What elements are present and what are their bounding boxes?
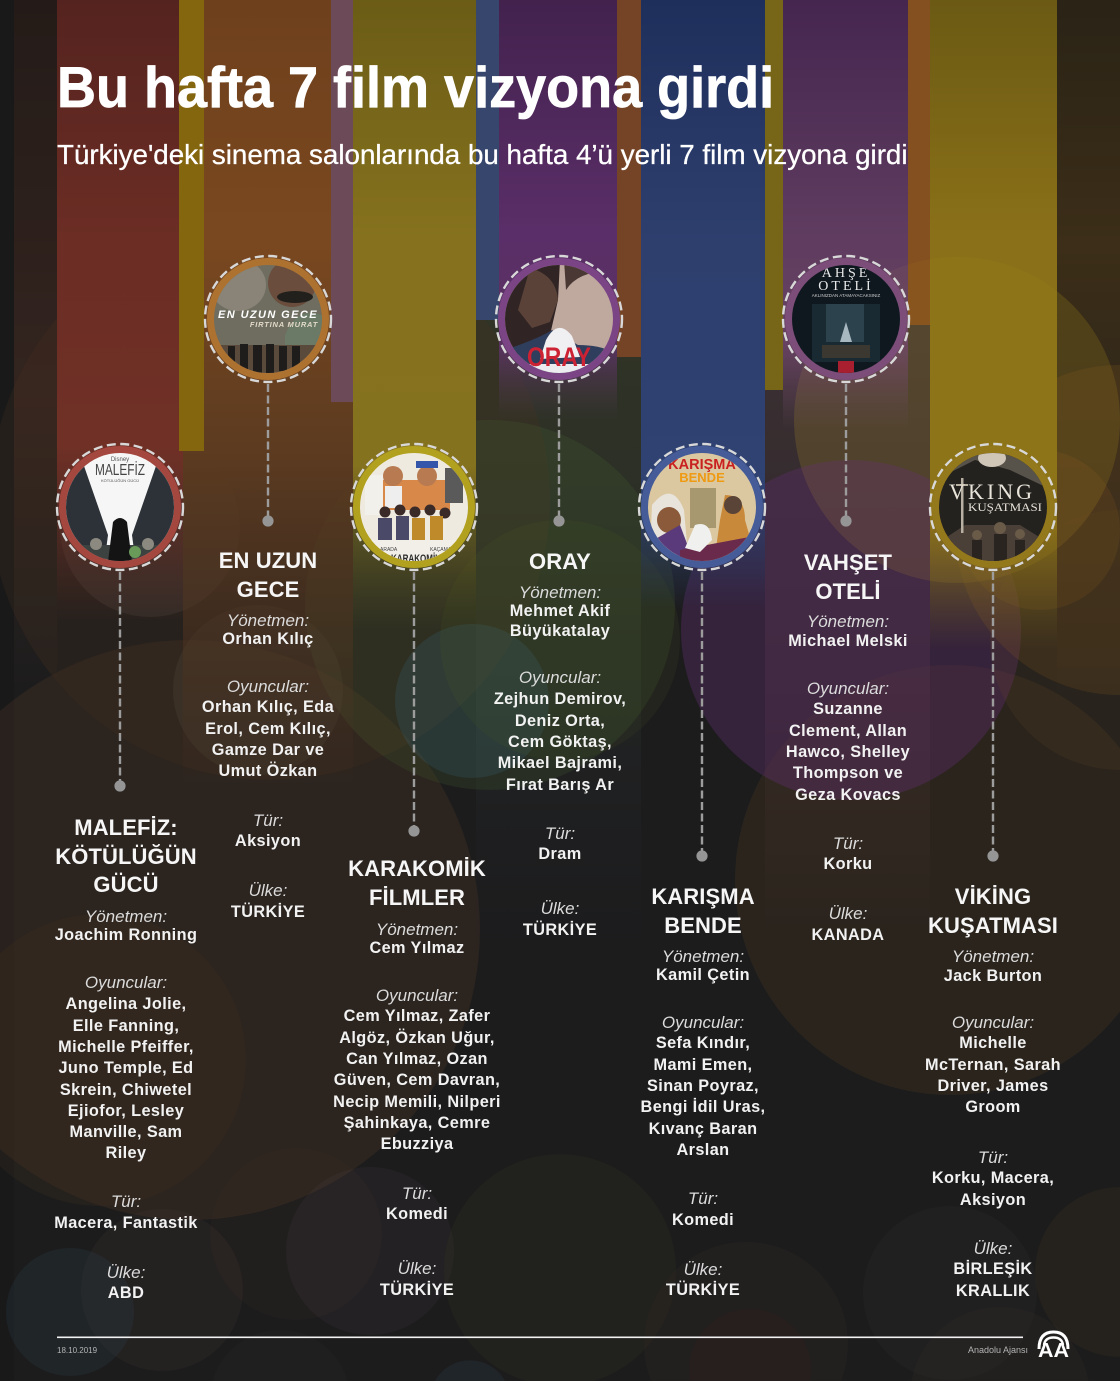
cast: Clement, Allan [789, 722, 907, 740]
cast label: Oyuncular: [952, 1013, 1034, 1032]
director label: Yönetmen: [227, 611, 309, 630]
cast: Can Yılmaz, Ozan [346, 1050, 488, 1068]
genre label: Tür: [978, 1148, 1008, 1167]
genre: Komedi [386, 1205, 448, 1223]
film title: BENDE [664, 913, 742, 938]
film title: ORAY [529, 549, 591, 574]
genre: Macera, Fantastik [54, 1214, 198, 1232]
poster: Vahşet Oteli: AKLINIZDAN ATAMAYACAKSINIZ [812, 293, 880, 298]
cast [202, 698, 334, 780]
genre: Aksiyon [235, 832, 301, 850]
cast: Ejiofor, Lesley [68, 1102, 184, 1120]
cast: Bengi İdil Uras, [641, 1098, 765, 1116]
genre: Korku, Macera, [932, 1169, 1054, 1187]
cast: Suzanne [813, 700, 883, 718]
film title: GÜCÜ [93, 872, 159, 897]
poster: Vahşet Oteli: OTELİ [818, 278, 874, 294]
director: Michael Melski [788, 632, 908, 650]
film title: KARAKOMİK [348, 856, 486, 881]
cast [925, 1034, 1061, 1116]
director [510, 602, 610, 640]
film title: KARIŞMA [651, 884, 755, 909]
poster: Viking Kuşatması: V [949, 479, 965, 504]
poster: En Uzun Gece: EN UZUN GECE [218, 309, 318, 321]
poster: Karakomik Filmler: ARADA [380, 547, 398, 553]
cast: Michelle Pfeiffer, [58, 1038, 194, 1056]
connector end dots [114, 515, 999, 862]
poster: Oray: ORAY [527, 342, 591, 372]
panel: Vahşet Oteli [786, 550, 910, 944]
film title: FİLMLER [369, 885, 465, 910]
film title: GECE [237, 577, 299, 602]
genre label: Tür: [688, 1189, 718, 1208]
cast label: Oyuncular: [807, 679, 889, 698]
director: Jack Burton [944, 967, 1042, 985]
genre [932, 1169, 1054, 1209]
cast: Şahinkaya, Cemre [344, 1114, 490, 1132]
cast [641, 1034, 765, 1159]
panel: Viking Kuşatması [925, 884, 1061, 1300]
genre label: Tür: [833, 834, 863, 853]
poster: Viking Kuşatması: KUŞATMASI [968, 500, 1042, 514]
cast: Thompson ve [793, 764, 903, 782]
cast: Algöz, Özkan Uğur, [339, 1029, 495, 1047]
poster: Viking Kuşatması [930, 444, 1056, 570]
cast: Orhan Kılıç, Eda [202, 698, 334, 716]
poster: Karakomik Filmler: KARAKOMİK [391, 552, 441, 565]
date: 18.10.2019 [57, 1346, 97, 1355]
country label: Ülke: [107, 1263, 145, 1282]
director label: Yönetmen: [376, 920, 458, 939]
cast [333, 1007, 501, 1153]
title: Bu hafta 7 film vizyona girdi [57, 56, 774, 120]
subtitle: Türkiye'deki sinema salonlarında bu hafta 4’ü yerli 7 film vizyona girdi [57, 139, 908, 170]
director: Joachim Ronning [55, 926, 197, 944]
poster: Karakomik Filmler [351, 444, 477, 570]
director label: Yönetmen: [807, 612, 889, 631]
country: KRALLIK [956, 1282, 1030, 1300]
poster: En Uzun Gece: FIRTINA MURAT [250, 320, 319, 329]
director: Büyükatalay [510, 622, 610, 640]
cast [786, 700, 910, 804]
panel: Oray [494, 549, 626, 939]
poster: Viking Kuşatması: KING [968, 479, 1032, 504]
film title: KUŞATMASI [928, 913, 1058, 938]
country: ABD [108, 1284, 144, 1302]
director label: Yönetmen: [519, 583, 601, 602]
film title [55, 815, 197, 897]
cast: Umut Özkan [218, 762, 318, 780]
genre label: Tür: [545, 824, 575, 843]
country label: Ülke: [829, 904, 867, 923]
film title [219, 548, 317, 602]
poster: Karışma Bende: BENDE [679, 470, 725, 485]
colour bars [57, 0, 1120, 800]
film title [651, 884, 755, 938]
genre label: Tür: [253, 811, 283, 830]
country: BİRLEŞİK [953, 1260, 1033, 1278]
director label: Yönetmen: [662, 947, 744, 966]
cast: Necip Memili, Nilperi [333, 1093, 501, 1111]
panel: Karakomik Filmler [333, 856, 501, 1299]
country label: Ülke: [684, 1260, 722, 1279]
genre: Dram [538, 845, 582, 863]
cast label: Oyuncular: [519, 668, 601, 687]
cast: McTernan, Sarah [925, 1056, 1061, 1074]
cast: Driver, James [937, 1077, 1049, 1095]
director label: Yönetmen: [85, 907, 167, 926]
cast: Sefa Kındır, [656, 1034, 750, 1052]
cast: Erol, Cem Kılıç, [205, 720, 331, 738]
cast: Güven, Cem Davran, [334, 1071, 500, 1089]
cast: Cem Göktaş, [508, 733, 612, 751]
film title: MALEFİZ: [74, 815, 178, 840]
film title [804, 550, 892, 604]
country: TÜRKİYE [231, 903, 305, 921]
cast [58, 995, 194, 1162]
country label: Ülke: [249, 881, 287, 900]
genre: Komedi [672, 1211, 734, 1229]
cast: Mami Emen, [653, 1056, 752, 1074]
genre label: Tür: [111, 1192, 141, 1211]
cast: Cem Yılmaz, Zafer [344, 1007, 490, 1025]
cast label: Oyuncular: [662, 1013, 744, 1032]
poster: Malefiz [57, 444, 183, 570]
cast: Gamze Dar ve [212, 741, 324, 759]
director: Mehmet Akif [510, 602, 610, 620]
poster: Malefiz: MALEFİZ [95, 460, 145, 479]
panel: Karışma Bende [641, 884, 765, 1299]
poster: En Uzun Gece [205, 256, 331, 382]
poster: Karakomik Filmler: KAÇAMAK [430, 547, 455, 553]
genre: Aksiyon [960, 1191, 1026, 1209]
cast: Michelle [959, 1034, 1027, 1052]
icon: Anadolu Ajansı logo [1038, 1332, 1069, 1362]
cast: Geza Kovacs [795, 786, 901, 804]
cast label: Oyuncular: [376, 986, 458, 1005]
cast: Zejhun Demirov, [494, 690, 626, 708]
poster: Vahşet Oteli: AHŞE [822, 266, 870, 281]
panel: Malefiz [54, 815, 198, 1302]
cast label: Oyuncular: [227, 677, 309, 696]
poster: Malefiz: Disney [111, 457, 129, 463]
film title: OTELİ [815, 579, 881, 604]
icon: Anadolu Ajansı logo: AA [1038, 1340, 1069, 1362]
cast: Riley [106, 1144, 146, 1162]
cast: Manville, Sam [70, 1123, 182, 1141]
cast: Elle Fanning, [73, 1017, 179, 1035]
poster: Karışma Bende: KARIŞMA [668, 457, 736, 473]
cast: Arslan [676, 1141, 730, 1159]
cast: Groom [965, 1098, 1021, 1116]
country label: Ülke: [541, 899, 579, 918]
panel: En Uzun Gece [202, 548, 334, 921]
country: KANADA [812, 926, 884, 944]
cast: Deniz Orta, [515, 712, 605, 730]
director: Kamil Çetin [656, 966, 750, 984]
country label: Ülke: [398, 1259, 436, 1278]
cast: Mikael Bajrami, [498, 754, 622, 772]
cast: Hawco, Shelley [786, 743, 910, 761]
cast [494, 690, 626, 794]
country: TÜRKİYE [380, 1281, 454, 1299]
country: TÜRKİYE [666, 1281, 740, 1299]
cast: Juno Temple, Ed [58, 1059, 194, 1077]
film title: KÖTÜLÜĞÜN [55, 844, 197, 869]
cast: Sinan Poyraz, [647, 1077, 759, 1095]
genre label: Tür: [402, 1184, 432, 1203]
poster: Vahşet Oteli [783, 256, 909, 382]
film title [928, 884, 1058, 938]
source: Anadolu Ajansı [968, 1345, 1028, 1355]
poster: Karışma Bende [639, 444, 765, 570]
dashed connector lines [120, 384, 993, 852]
film title [348, 856, 486, 910]
director label: Yönetmen: [952, 947, 1034, 966]
country label: Ülke: [974, 1239, 1012, 1258]
cast label: Oyuncular: [85, 973, 167, 992]
country [953, 1260, 1033, 1300]
cast: Skrein, Chiwetel [60, 1081, 192, 1099]
film title: VİKİNG [955, 884, 1031, 909]
cast: Kıvanç Baran [649, 1120, 757, 1138]
director: Orhan Kılıç [222, 630, 314, 648]
cast: Ebuzziya [381, 1135, 453, 1153]
film title: VAHŞET [804, 550, 892, 575]
country: TÜRKİYE [523, 921, 597, 939]
poster: Malefiz: KÖTÜLÜĞÜN GÜCÜ [101, 478, 139, 483]
cast: Angelina Jolie, [66, 995, 186, 1013]
genre: Korku [823, 855, 873, 873]
poster: Oray [496, 256, 622, 382]
film title: EN UZUN [219, 548, 317, 573]
footer rule [57, 1336, 1023, 1338]
director: Cem Yılmaz [369, 939, 465, 957]
cast: Fırat Barış Ar [506, 776, 614, 794]
